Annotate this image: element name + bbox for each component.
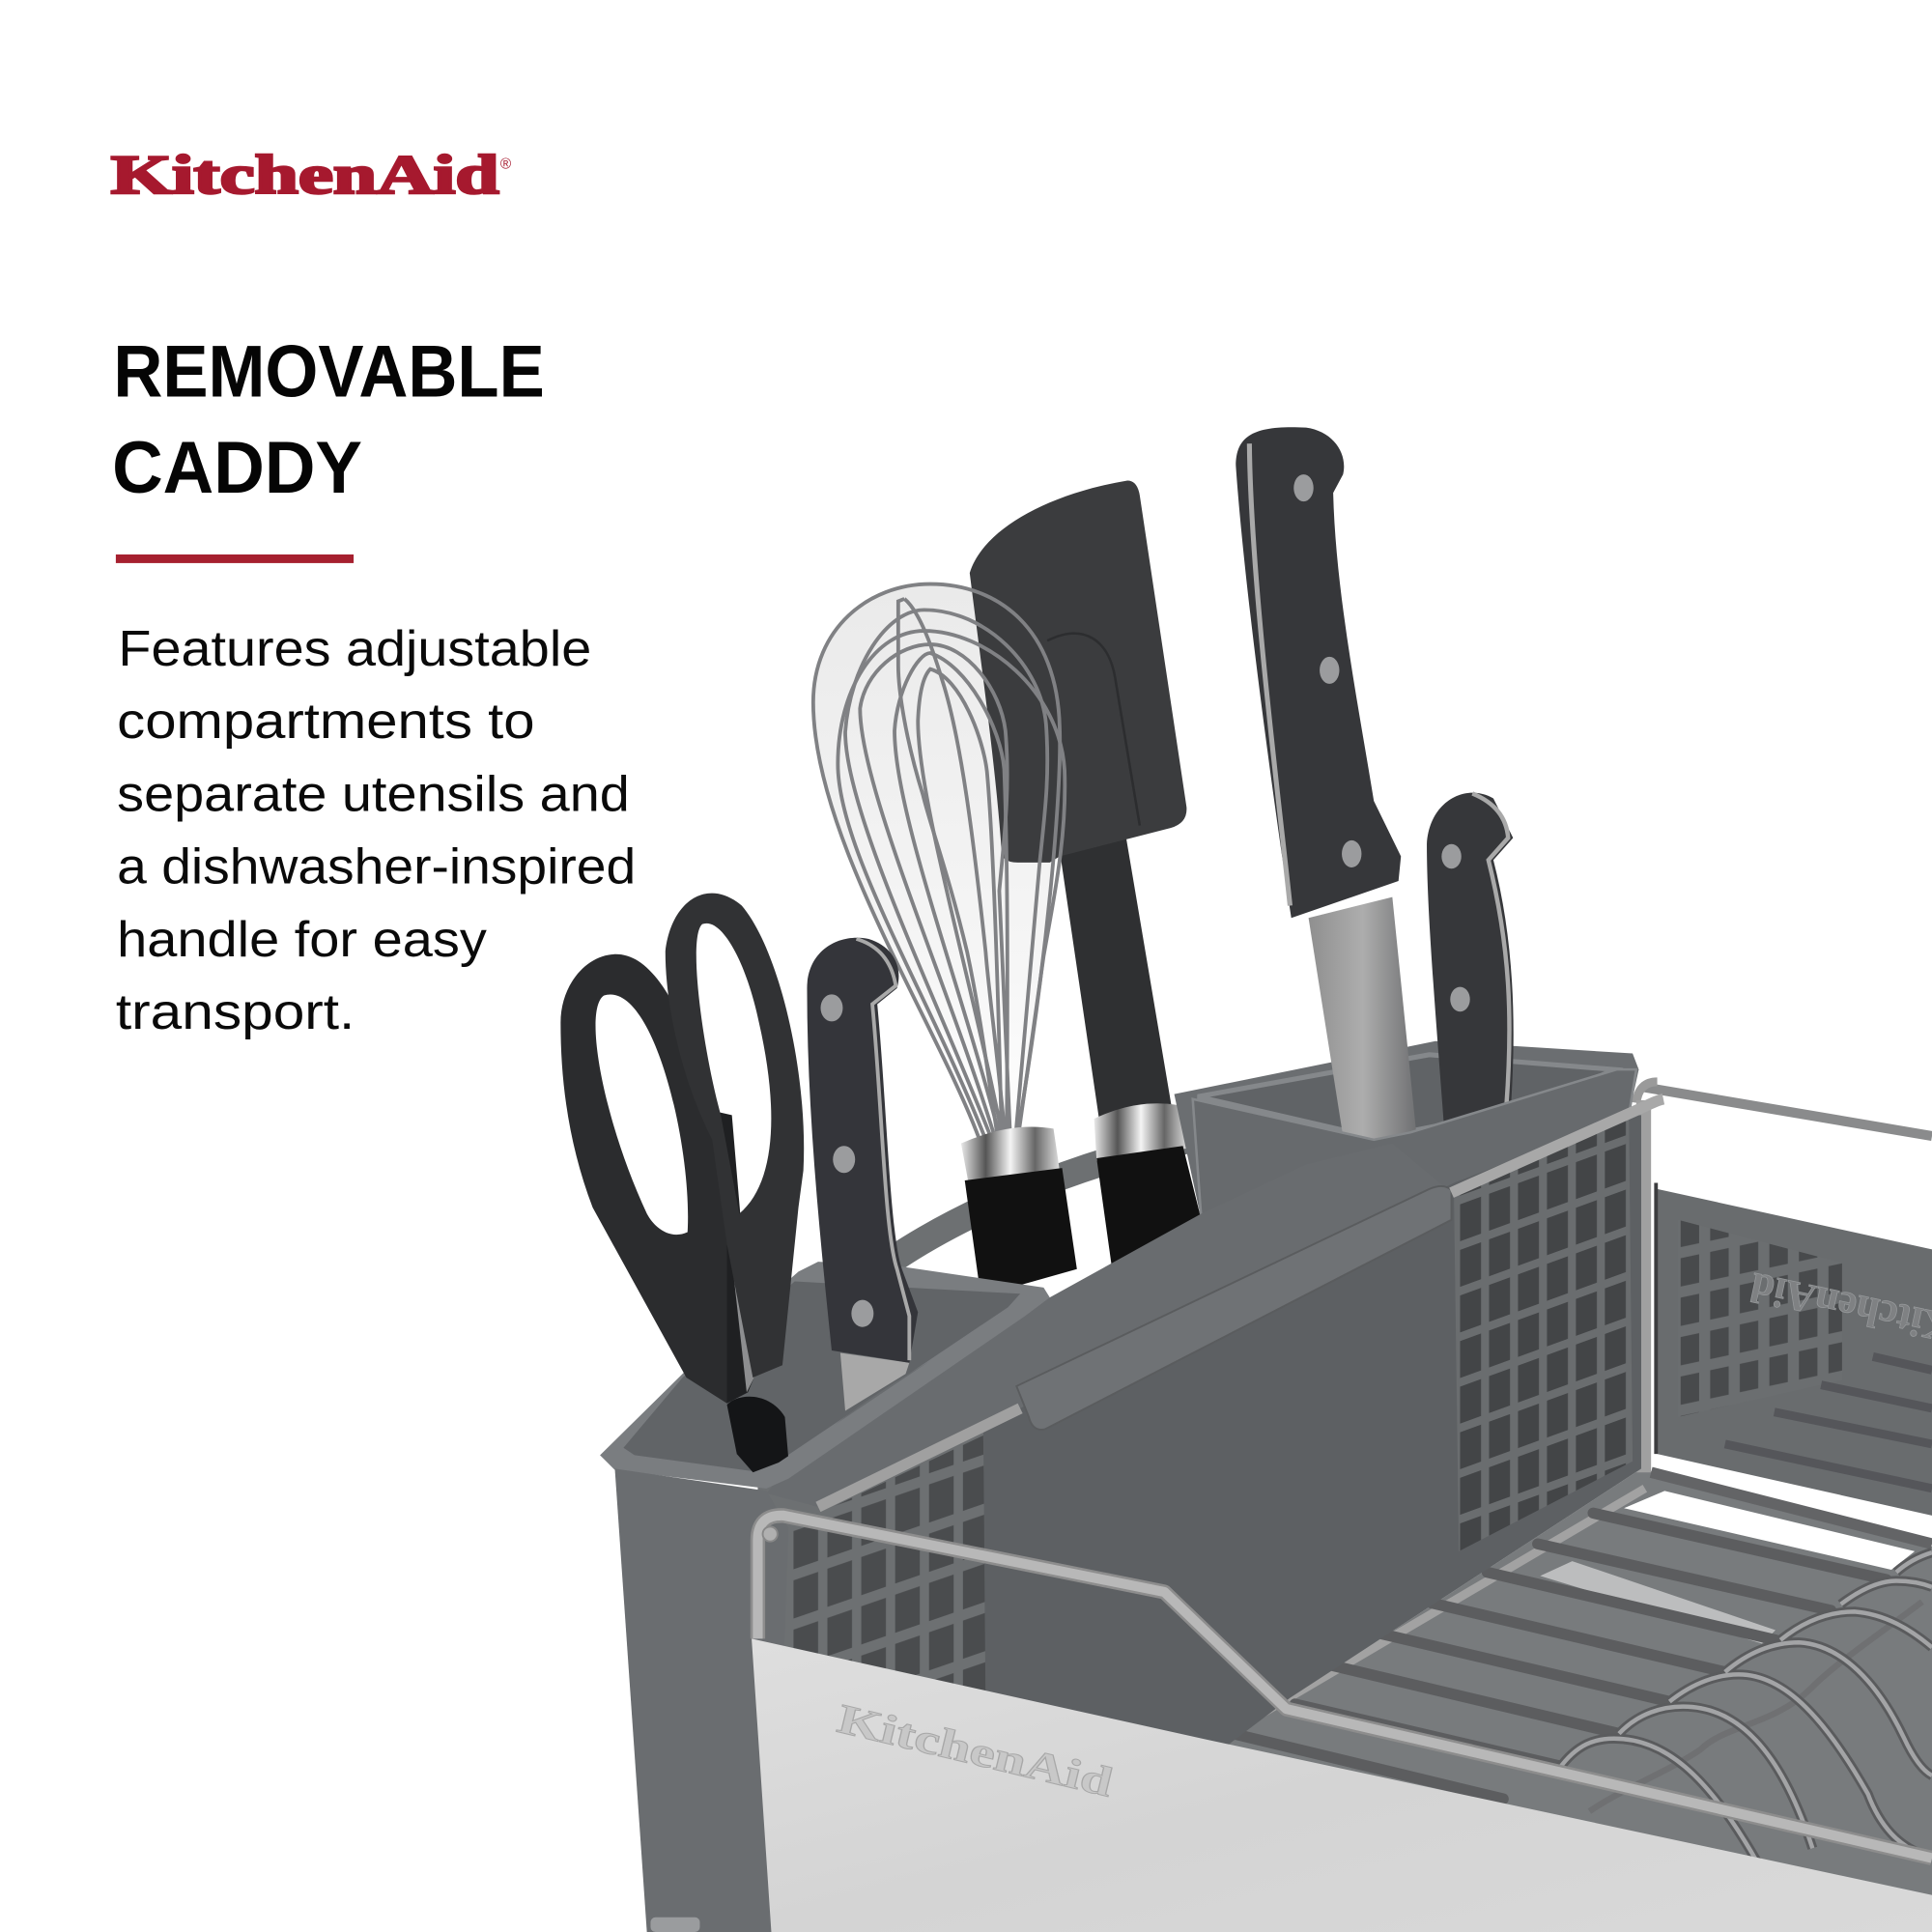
- front wire rail: [757, 1516, 1932, 1858]
- upper wire rails: [818, 1099, 1663, 1507]
- body text: transport.: [116, 984, 355, 1040]
- caddy left grid: [757, 1392, 992, 1725]
- body text: Features adjustable: [118, 621, 591, 677]
- caddy right grid: [1454, 1115, 1633, 1551]
- right cup front lip: [1193, 1069, 1636, 1220]
- heading: Removable Caddy: CADDY: [112, 427, 362, 509]
- caddy clip strip: [1016, 1186, 1452, 1430]
- logo: KitchenAid: KitchenAid: [111, 145, 499, 206]
- whisk glass fill: [813, 584, 1060, 1140]
- product: dish rack with caddy: [560, 427, 1932, 1932]
- body text: separate utensils and: [117, 766, 630, 822]
- caddy left side wall: [614, 1468, 788, 1932]
- caddy solid panel: [983, 1115, 1641, 1756]
- small left knife: [807, 938, 918, 1410]
- body text: compartments to: [117, 694, 535, 750]
- body text: a dishwasher-inspired: [117, 839, 636, 895]
- rack floor and rods: [1208, 1458, 1932, 1922]
- body text: handle for easy: [117, 912, 488, 968]
- rack corner post: [1644, 1100, 1656, 1472]
- caddy back arc: [894, 1140, 1189, 1260]
- caddy foot: [650, 1918, 699, 1932]
- rack back section: [1636, 1082, 1932, 1516]
- embossed logo on panel: KitchenAid: [833, 1695, 1117, 1806]
- red divider rule: [116, 554, 354, 563]
- large knife: [1236, 427, 1417, 1152]
- caddy left cup back: [600, 1262, 1050, 1488]
- stainless front panel: [752, 1638, 1932, 1932]
- heading: Removable Caddy: [112, 331, 545, 509]
- caddy sloped wing with front rim: [600, 1144, 1452, 1507]
- right caddy cup: [1175, 1041, 1638, 1220]
- scissors: [560, 894, 804, 1474]
- small right knife: [1427, 793, 1514, 1127]
- whisk: [813, 584, 1077, 1296]
- body text: [116, 621, 636, 1040]
- heading: Removable Caddy: REMOVABLE: [113, 331, 545, 413]
- logo: KitchenAid: [111, 145, 512, 206]
- logo: KitchenAid: ®: [500, 156, 512, 173]
- spatula: [970, 480, 1202, 1264]
